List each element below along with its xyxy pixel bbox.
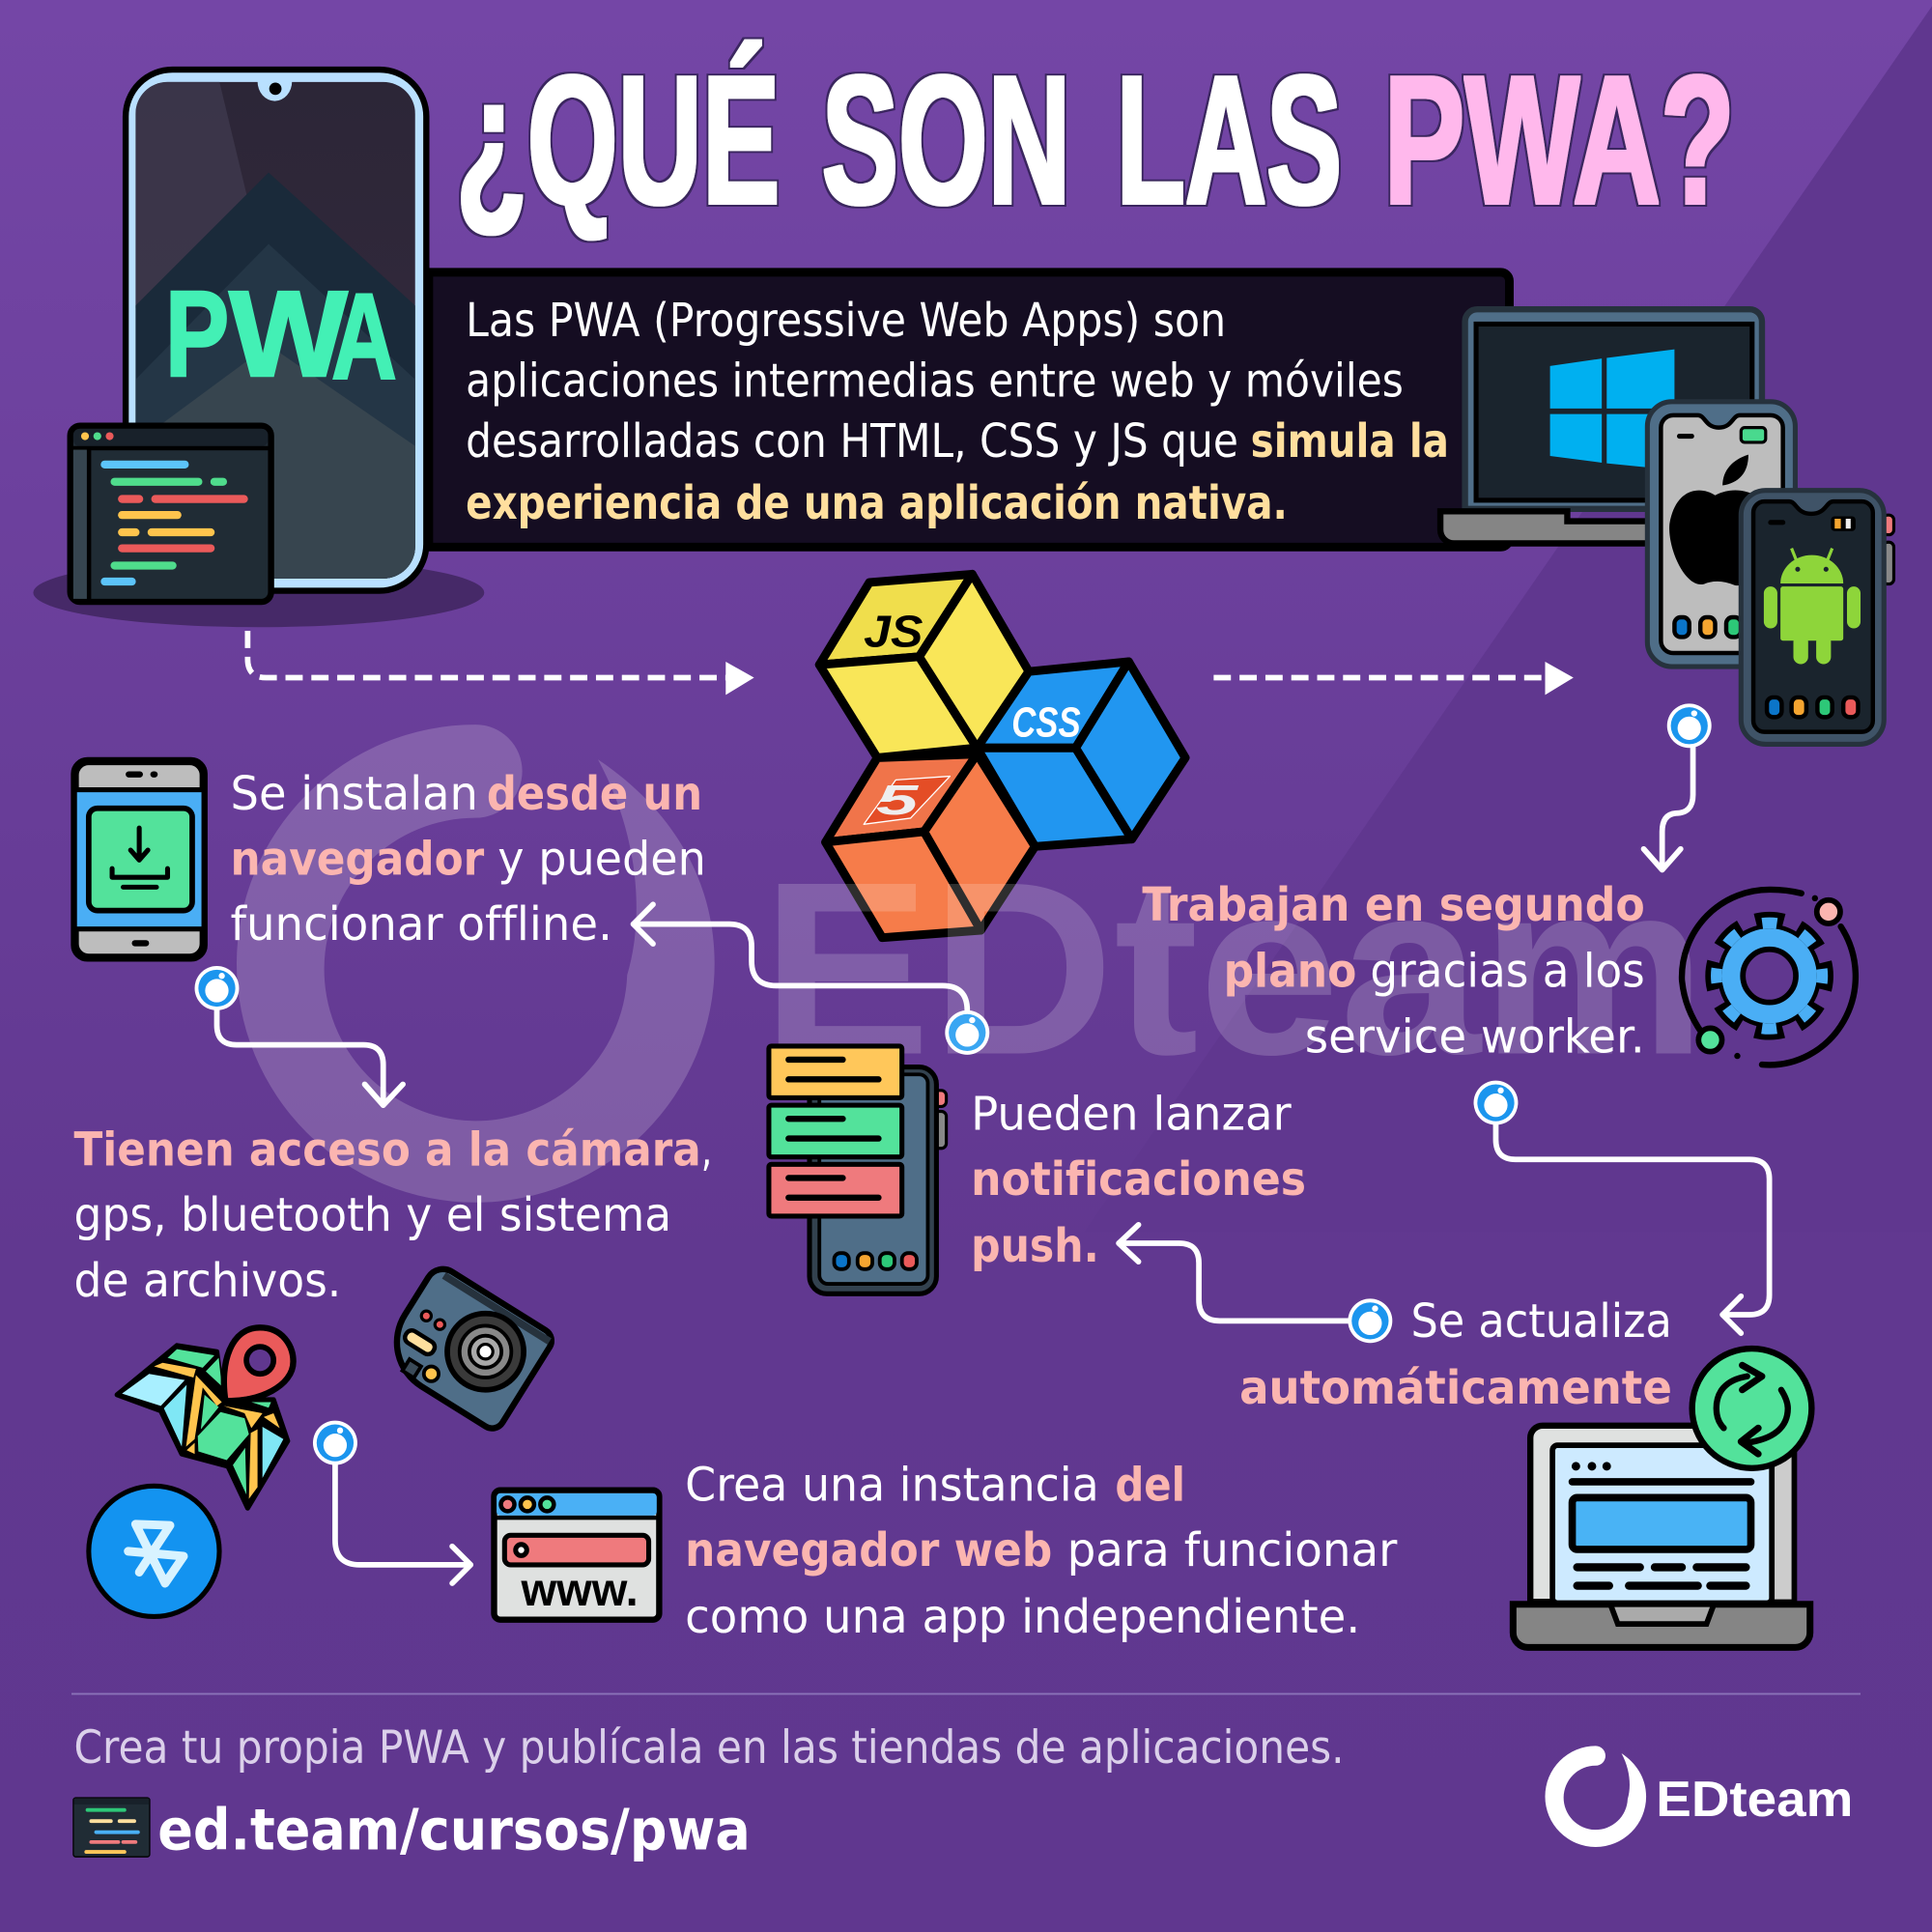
device shadow <box>33 558 484 627</box>
cube: JS: JS <box>864 607 923 657</box>
text: auto update: automáticamente <box>1239 1361 1672 1415</box>
PWA logo: A <box>331 269 397 405</box>
watermark logo: EDteam <box>761 832 1707 1107</box>
icon: install phone <box>74 760 205 958</box>
text: service worker <box>1142 878 1645 1064</box>
sync badge <box>1692 1349 1811 1468</box>
icon: notifications phone <box>769 1046 947 1293</box>
pin <box>224 1327 294 1401</box>
connector: devices to service worker <box>1644 747 1693 870</box>
text: install: desde un <box>487 767 702 821</box>
connector: access to browser instance <box>335 1463 470 1583</box>
connector: notifications to install <box>634 904 967 1010</box>
title: ¿QUÉ <box>456 38 780 242</box>
text: push notifications <box>971 1088 1306 1273</box>
definition text: simula la <box>1251 414 1449 469</box>
text: service worker: plano <box>1224 945 1356 999</box>
text: device access: , <box>701 1123 712 1178</box>
definition text: desarrolladas con HTML, CSS y JS que <box>466 414 1238 469</box>
icon: laptop with Windows <box>1440 309 1762 543</box>
definition text: aplicaciones intermedias entre web y móviles <box>466 355 1404 409</box>
footer url: ed.team/cursos/pwa <box>157 1798 751 1863</box>
text: service worker: service worker. <box>1305 1009 1645 1064</box>
text: push notifications: push. <box>971 1219 1099 1273</box>
notification bars <box>769 1046 902 1216</box>
connector: install to access <box>216 1010 403 1105</box>
node markers <box>195 703 1712 1465</box>
cube: JS <box>819 574 1029 757</box>
footer tagline: Crea tu propia PWA y publícala en las tiendas de aplicaciones. <box>74 1721 1345 1775</box>
text: install: y pueden <box>497 833 706 887</box>
text: auto update <box>1239 1294 1672 1415</box>
icon: code window <box>71 426 271 602</box>
text: browser instance: Crea una instancia <box>685 1459 1099 1513</box>
arrow: phone to technologies <box>247 631 754 695</box>
icon: Android phone <box>1741 491 1893 744</box>
icon: browser www: www. <box>521 1564 639 1616</box>
text: browser instance: para funcionar <box>1067 1523 1397 1577</box>
connector: update to notifications <box>1119 1225 1350 1321</box>
text: service worker: Trabajan en segundo <box>1142 878 1645 932</box>
text: browser instance: navegador web <box>685 1523 1052 1577</box>
title: PWA? <box>1383 38 1735 242</box>
icon: PWA phone <box>126 70 426 591</box>
watermark logo <box>237 724 1707 1203</box>
icon: gear <box>1682 890 1856 1065</box>
icon: bluetooth <box>89 1486 219 1616</box>
definition text: Las PWA (Progressive Web Apps) son <box>466 294 1226 348</box>
panel: definition <box>429 272 1509 547</box>
text: push notifications: notificaciones <box>971 1152 1306 1207</box>
EDteam logo: EDteam <box>1656 1772 1853 1828</box>
icon: laptop with sync <box>1513 1349 1811 1647</box>
text: browser instance <box>685 1459 1397 1644</box>
icon: iPhone <box>1647 402 1795 667</box>
icon: map with pin <box>117 1327 294 1508</box>
text: device access: Tienen acceso a la cámara <box>74 1123 701 1178</box>
text: install: funcionar offline. <box>231 897 612 952</box>
arrow: technologies to devices <box>1213 662 1574 695</box>
definition text: experiencia de una aplicación nativa. <box>466 476 1288 530</box>
EDteam logo <box>1545 1746 1853 1847</box>
cube: CSS <box>977 662 1185 846</box>
definition text <box>466 294 1449 530</box>
text: device access <box>74 1123 712 1308</box>
title: SON <box>822 38 1070 242</box>
text: auto update: Se actualiza <box>1410 1294 1672 1349</box>
cube: HTML5: 5 <box>876 778 920 824</box>
text: install: Se instalan <box>231 767 478 821</box>
text: device access: de archivos. <box>74 1254 341 1308</box>
PWA logo: W <box>229 266 349 402</box>
text: install <box>231 767 706 952</box>
title <box>456 38 1735 242</box>
icon: technology cubes <box>819 574 1185 938</box>
PWA logo <box>165 266 397 405</box>
text: install: navegador <box>231 833 484 887</box>
text: browser instance: del <box>1115 1459 1185 1513</box>
cube: CSS: CSS <box>1011 700 1081 747</box>
text: browser instance: como una app independiente. <box>685 1590 1360 1644</box>
cube: HTML5 <box>826 754 1035 938</box>
PWA logo: P <box>165 266 229 402</box>
icon: camera <box>378 1263 556 1433</box>
connector: service worker to update <box>1495 1123 1770 1333</box>
text: push notifications: Pueden lanzar <box>971 1088 1292 1142</box>
icon: footer code window <box>73 1798 150 1857</box>
text: service worker: gracias a los <box>1370 945 1645 999</box>
title: LAS <box>1117 38 1342 242</box>
text: device access: gps, bluetooth y el sistema <box>74 1188 671 1242</box>
icon: browser www <box>494 1491 659 1620</box>
